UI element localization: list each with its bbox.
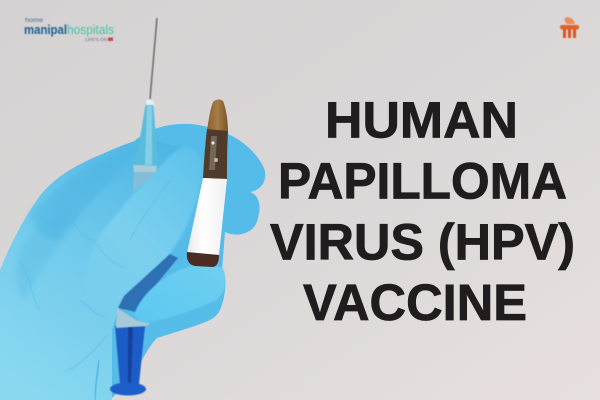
upper hand shading	[30, 145, 140, 240]
syringe plunger	[110, 326, 146, 396]
glove main body	[0, 138, 201, 400]
title: Human Papilloma Virus (HPV) Vaccine	[270, 92, 575, 331]
logo: Manipal Hospitals	[24, 18, 114, 42]
ampoule	[187, 100, 228, 267]
title: Human Papilloma Virus (HPV) Vaccine: VIRUS (HPV)	[270, 214, 575, 270]
icon: orange flame and pillars emblem	[560, 17, 579, 38]
ampoule dark base	[187, 252, 219, 267]
glove crease	[20, 180, 170, 372]
title: Human Papilloma Virus (HPV) Vaccine: VACCINE	[303, 274, 527, 331]
illustration: gloved hand with syringe and ampoule	[0, 18, 265, 400]
glove seam line	[95, 360, 99, 400]
title: Human Papilloma Virus (HPV) Vaccine: HUMAN	[325, 92, 518, 148]
logo: Manipal Hospitals: home	[25, 18, 44, 24]
logo: Manipal Hospitals: hospitals	[67, 22, 114, 37]
lower fingers	[90, 258, 225, 400]
title: Human Papilloma Virus (HPV) Vaccine: PAPILLOMA	[278, 152, 567, 210]
syringe needle	[150, 18, 157, 99]
right fingers behind ampoule	[130, 124, 265, 270]
thumb	[85, 147, 202, 316]
syringe needle hub	[133, 100, 158, 192]
ampoule tip	[207, 100, 228, 132]
syringe flange	[116, 308, 150, 328]
front lower finger	[135, 265, 225, 322]
ampoule white label	[187, 178, 227, 255]
syringe barrel	[118, 254, 178, 312]
ampoule neck with liquid	[203, 129, 228, 179]
logo: Manipal Hospitals: LIFE'S ON	[85, 37, 107, 42]
logo: Manipal Hospitals: manipal	[24, 22, 67, 37]
soft glove shading	[16, 212, 80, 300]
